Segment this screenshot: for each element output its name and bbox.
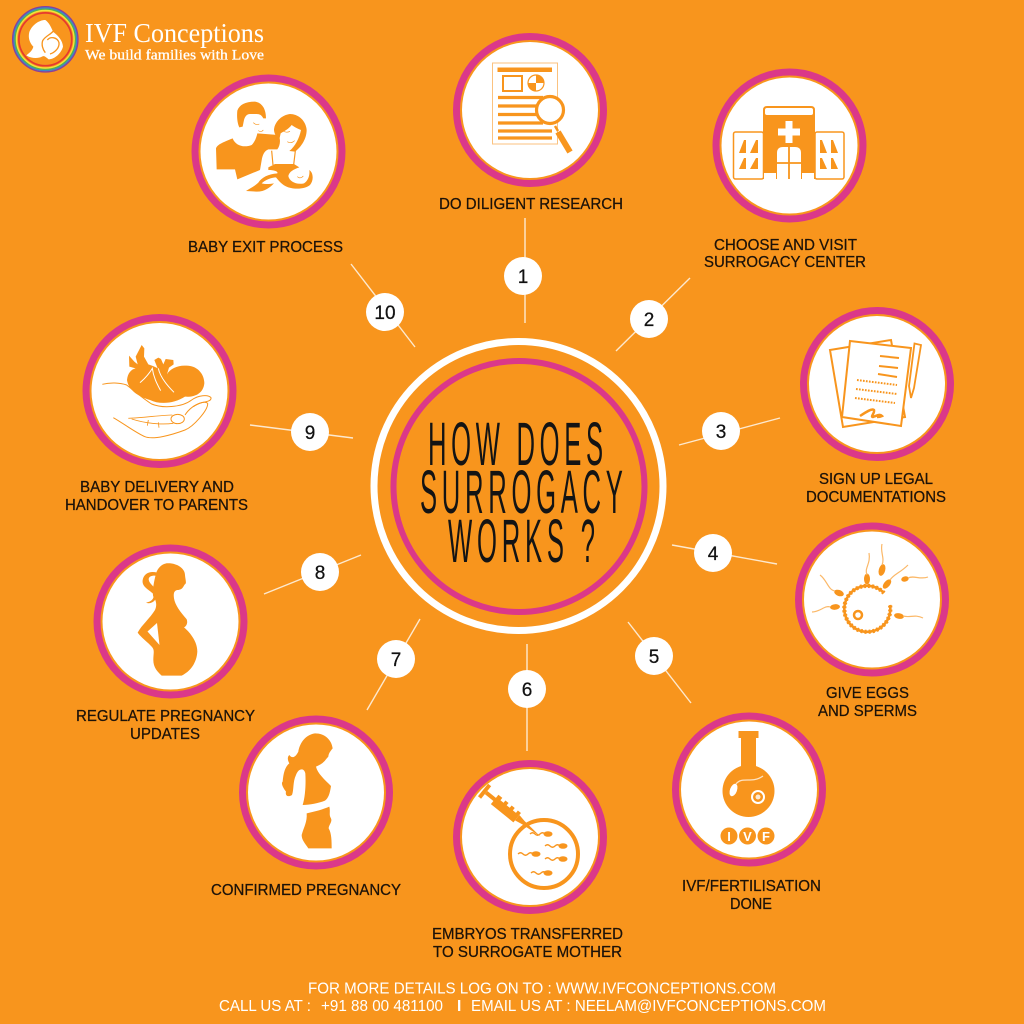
step 10 number xyxy=(351,264,415,347)
step 3 number: 3 xyxy=(716,422,726,443)
step 5 label: IVF/FERTILISATION xyxy=(682,878,821,895)
title: WORKS ? xyxy=(448,507,595,575)
step 4 label: GIVE EGGS xyxy=(826,685,909,702)
step 5 number: 5 xyxy=(649,647,659,668)
step 5 label xyxy=(682,878,821,913)
step 7 number: 7 xyxy=(391,650,401,671)
step 5 label: DONE xyxy=(730,896,772,913)
step 6 panel: embryo transfer syringe icon xyxy=(456,764,604,910)
step 1 panel: research icon xyxy=(456,36,604,184)
title: SURROGACY xyxy=(420,458,623,526)
central title circle xyxy=(374,342,663,630)
step 2 number: 2 xyxy=(644,310,654,331)
step 7 label: CONFIRMED PREGNANCY xyxy=(211,882,401,899)
footer contact details: I xyxy=(457,998,461,1015)
step 9 number: 9 xyxy=(305,423,315,444)
footer contact details xyxy=(219,980,826,1015)
step 6 label: EMBRYOS TRANSFERRED xyxy=(432,926,623,943)
step 7 number xyxy=(367,619,420,710)
step 3 panel: legal documents icon xyxy=(804,310,950,458)
step 8 number xyxy=(264,553,361,594)
step 9 panel: baby in hand icon xyxy=(86,318,233,464)
step 5 number xyxy=(628,622,691,703)
step 2 label xyxy=(704,237,866,271)
step 6 number: 6 xyxy=(522,680,532,701)
step 5 panel: IVF flask icon: V xyxy=(743,829,752,844)
connectors and number badges xyxy=(250,218,780,751)
footer contact details: CALL US AT : xyxy=(219,998,311,1015)
step 5 panel: IVF flask icon: I xyxy=(727,829,731,844)
step 8 label: REGULATE PREGNANCY xyxy=(76,708,255,725)
step 5 panel: IVF flask icon xyxy=(676,716,822,863)
step 9 label: HANDOVER TO PARENTS xyxy=(65,497,248,514)
step 1 number xyxy=(504,218,542,323)
step 8 number: 8 xyxy=(315,563,325,584)
step 6 label: TO SURROGATE MOTHER xyxy=(433,944,622,961)
step 1 number: 1 xyxy=(518,267,528,288)
logo xyxy=(13,7,264,72)
step 2 label: SURROGACY CENTER xyxy=(704,254,866,271)
step 8 label xyxy=(76,708,255,743)
footer contact details: EMAIL US AT : NEELAM@IVFCONCEPTIONS.COM xyxy=(471,998,826,1015)
step 9 number xyxy=(250,413,353,451)
title xyxy=(420,410,623,575)
step 9 label xyxy=(65,479,248,514)
step 6 label xyxy=(432,926,623,961)
step 4 number: 4 xyxy=(708,544,719,565)
logo rainbow emblem xyxy=(13,7,78,72)
step 10 label: BABY EXIT PROCESS xyxy=(188,239,343,256)
step 4 number xyxy=(672,534,777,572)
step 4 label: AND SPERMS xyxy=(818,703,917,720)
step 2 panel: hospital icon xyxy=(716,72,863,219)
step 3 label xyxy=(806,471,946,506)
logo tagline: We build families with Love xyxy=(85,48,264,64)
step 10 panel: parents with baby icon xyxy=(195,78,342,225)
footer contact details: +91 88 00 481100 xyxy=(321,998,443,1015)
step 9 label: BABY DELIVERY AND xyxy=(80,479,234,496)
step 1 label: DO DILIGENT RESEARCH xyxy=(439,196,623,213)
step 3 label: DOCUMENTATIONS xyxy=(806,489,946,506)
step 4 label xyxy=(818,685,917,720)
step 3 label: SIGN UP LEGAL xyxy=(819,471,933,488)
step 2 label: CHOOSE AND VISIT xyxy=(714,237,858,254)
footer contact details: FOR MORE DETAILS LOG ON TO : WWW.IVFCONCEPTIONS.COM xyxy=(308,980,776,998)
step 2 number xyxy=(616,278,690,351)
step 8 panel: pregnancy silhouette icon xyxy=(97,548,244,695)
step 4 panel: eggs and sperm icon xyxy=(798,526,946,673)
step 3 number xyxy=(679,412,780,450)
step 8 label: UPDATES xyxy=(130,726,200,743)
step 7 panel: confirmed pregnancy icon xyxy=(242,719,390,866)
title: HOW DOES xyxy=(428,410,603,478)
step 10 number: 10 xyxy=(374,303,396,324)
step 5 panel: IVF flask icon: F xyxy=(762,829,770,844)
step 6 number xyxy=(508,644,546,751)
logo name: IVF Conceptions xyxy=(85,18,264,48)
